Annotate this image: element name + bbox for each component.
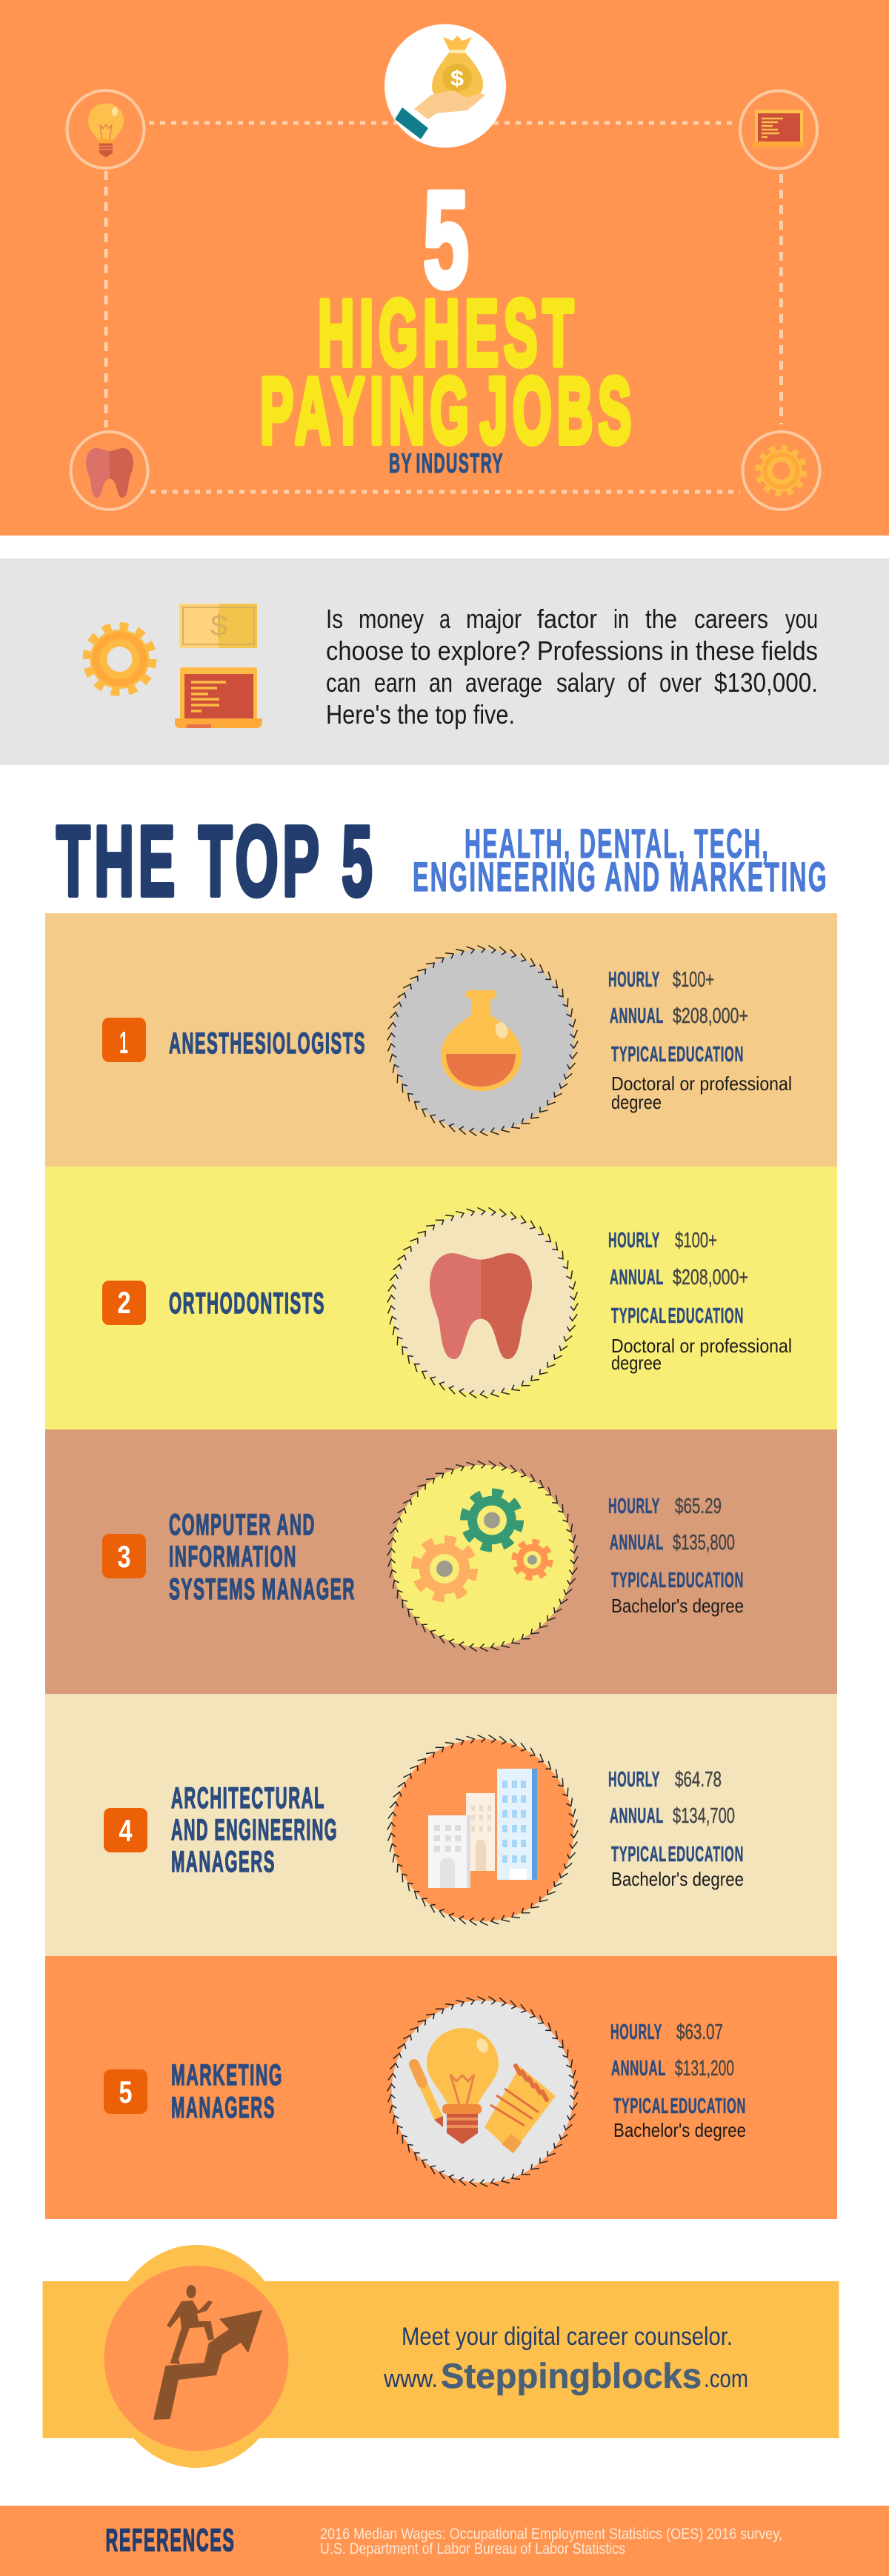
icon: laptop xyxy=(175,667,262,728)
panel: rank 2 orthodontists xyxy=(45,1167,837,1429)
text: sources: 2016 Median Wages: Occupational Employment Statistics (OES) 2016 survey, xyxy=(320,2526,782,2543)
icon: gear xyxy=(742,432,819,510)
salary details: $208,000+ xyxy=(673,1004,748,1028)
job title: ANESTHESIOLOGISTS xyxy=(169,1027,366,1060)
salary details: ANNUAL xyxy=(610,1004,664,1028)
job title: INFORMATION xyxy=(169,1541,297,1573)
text: intro paragraph: salary xyxy=(556,667,615,698)
text: intro paragraph: earn xyxy=(374,667,416,698)
text: intro paragraph: a xyxy=(439,604,451,634)
salary details: HOURLY xyxy=(608,1229,660,1252)
text: intro paragraph: major xyxy=(466,604,522,634)
salary details: $65.29 xyxy=(675,1495,722,1518)
rank badge 3: 3 xyxy=(117,1539,130,1574)
icon: flask xyxy=(362,926,604,1155)
salary details: $208,000+ xyxy=(673,1266,748,1289)
salary details: $100+ xyxy=(675,1229,717,1252)
text: intro paragraph: you xyxy=(785,604,818,634)
text: website: Steppingblocks xyxy=(441,2356,702,2395)
panel: call to action xyxy=(43,2245,839,2468)
panel: rank 1 anesthesiologists xyxy=(45,913,837,1167)
salary details: Doctoral or professional xyxy=(611,1072,792,1095)
rank badge 5 xyxy=(104,2069,147,2114)
text: website: .com xyxy=(704,2365,748,2393)
salary details: $135,800 xyxy=(673,1531,735,1555)
text: intro paragraph: over xyxy=(659,667,702,698)
heading: the top 5: THE TOP 5 xyxy=(56,805,376,917)
rank badge 3 xyxy=(102,1534,146,1578)
salary details: ANNUAL xyxy=(611,2057,666,2081)
panel: rank 4 architectural and engineering managers xyxy=(45,1694,837,1956)
salary details: TYPICAL EDUCATION xyxy=(611,1843,744,1866)
text: intro paragraph: an xyxy=(429,667,453,698)
job title: ORTHODONTISTS xyxy=(169,1287,325,1320)
salary details: TYPICAL EDUCATION xyxy=(613,2095,746,2118)
job title: MANAGERS xyxy=(171,1846,276,1878)
rank badge 1: 1 xyxy=(119,1025,128,1060)
job title: ARCHITECTURAL xyxy=(171,1782,325,1815)
rank badge 2 xyxy=(102,1281,146,1325)
icon: light bulb xyxy=(67,90,144,168)
text: intro paragraph: of xyxy=(627,667,647,698)
text: intro paragraph: careers xyxy=(694,604,768,634)
salary details: degree xyxy=(611,1352,662,1374)
salary details: TYPICAL EDUCATION xyxy=(611,1569,744,1592)
text: intro paragraph: Here's the top five. xyxy=(326,699,515,730)
icon: dollar bill: $ xyxy=(210,610,227,642)
salary details: Bachelor's degree xyxy=(611,1868,744,1890)
salary details: TYPICAL EDUCATION xyxy=(611,1304,744,1328)
salary details xyxy=(610,2021,746,2141)
salary details: Bachelor's degree xyxy=(613,2119,746,2141)
salary details: HOURLY xyxy=(608,968,660,992)
icon: buildings xyxy=(362,1715,604,1945)
rank badge 5: 5 xyxy=(119,2075,132,2109)
text: intro paragraph: choose to explore? Professions in these fields xyxy=(326,635,818,666)
heading: industries xyxy=(413,820,828,900)
footer: references xyxy=(0,2506,889,2576)
panel: rank 5 marketing managers xyxy=(45,1956,837,2219)
salary details xyxy=(608,1495,744,1617)
text: intro paragraph: $130,000. xyxy=(714,667,818,698)
rank badge 4 xyxy=(104,1808,147,1852)
salary details: $64.78 xyxy=(675,1768,722,1792)
icon: gear xyxy=(87,627,153,692)
dotted connector frame xyxy=(106,123,781,492)
job title: MARKETING xyxy=(171,2059,283,2092)
text: intro paragraph: the xyxy=(645,604,677,634)
text: intro paragraph: in xyxy=(613,604,629,634)
title: highest: HIGHEST xyxy=(318,281,579,385)
salary details: $134,700 xyxy=(673,1804,735,1828)
salary details xyxy=(608,1229,792,1374)
text: intro paragraph: average xyxy=(465,667,542,698)
icon: tooth xyxy=(362,1188,604,1418)
salary details: $131,200 xyxy=(675,2057,734,2081)
job title: COMPUTER AND xyxy=(169,1509,316,1541)
icon: money bag in hand: $ xyxy=(450,67,464,91)
text: intro paragraph: can xyxy=(326,667,361,698)
text: intro paragraph: money xyxy=(359,604,424,634)
text: intro paragraph: Is xyxy=(326,604,343,634)
salary details: HOURLY xyxy=(608,1495,660,1518)
job title xyxy=(171,1782,338,1878)
icon: bulb, pencil and notepad xyxy=(362,1977,604,2206)
salary details xyxy=(608,1768,744,1890)
salary details: Bachelor's degree xyxy=(611,1595,744,1617)
rank badge 4: 4 xyxy=(119,1813,133,1848)
salary details: ANNUAL xyxy=(610,1804,664,1828)
salary details: ANNUAL xyxy=(610,1266,664,1289)
subtitle: by industry: BY INDUSTRY xyxy=(389,448,504,478)
icon: laptop xyxy=(740,90,817,169)
text: website: www. xyxy=(383,2365,438,2393)
job title: MANAGERS xyxy=(171,2092,276,2124)
salary details: ANNUAL xyxy=(610,1531,664,1555)
job title xyxy=(169,1509,356,1606)
salary details: degree xyxy=(611,1091,662,1113)
icon: climbing man on arrow xyxy=(104,2266,289,2451)
salary details: $100+ xyxy=(673,968,714,992)
salary details: HOURLY xyxy=(610,2021,662,2044)
icon: money bag in hand xyxy=(384,24,506,148)
salary details: HOURLY xyxy=(608,1768,660,1792)
text: intro paragraph: factor xyxy=(537,604,597,634)
icon: tooth xyxy=(71,432,148,510)
job title xyxy=(171,2059,283,2124)
text: sources xyxy=(320,2526,782,2557)
text: meet your digital career counselor: Meet your digital career counselor. xyxy=(402,2323,733,2351)
panel: intro xyxy=(0,558,889,765)
text: sources: U.S. Department of Labor Bureau of Labor Statistics xyxy=(320,2540,625,2557)
heading: references: REFERENCES xyxy=(105,2523,236,2558)
panel: rank 3 computer and information systems manager xyxy=(45,1429,837,1694)
icon: gears xyxy=(362,1441,604,1671)
job title: SYSTEMS MANAGER xyxy=(169,1573,356,1606)
rank badge 1 xyxy=(102,1018,146,1062)
icon: dollar bill xyxy=(179,604,257,648)
job title: AND ENGINEERING xyxy=(171,1814,338,1846)
text: intro paragraph xyxy=(326,604,818,730)
title: 5: 5 xyxy=(423,164,469,316)
hero banner xyxy=(0,0,889,535)
rank badge 2: 2 xyxy=(117,1285,130,1320)
salary details: $63.07 xyxy=(676,2021,723,2044)
salary details xyxy=(608,968,792,1113)
salary details: Doctoral or professional xyxy=(611,1335,792,1357)
salary details: TYPICAL EDUCATION xyxy=(611,1043,744,1067)
